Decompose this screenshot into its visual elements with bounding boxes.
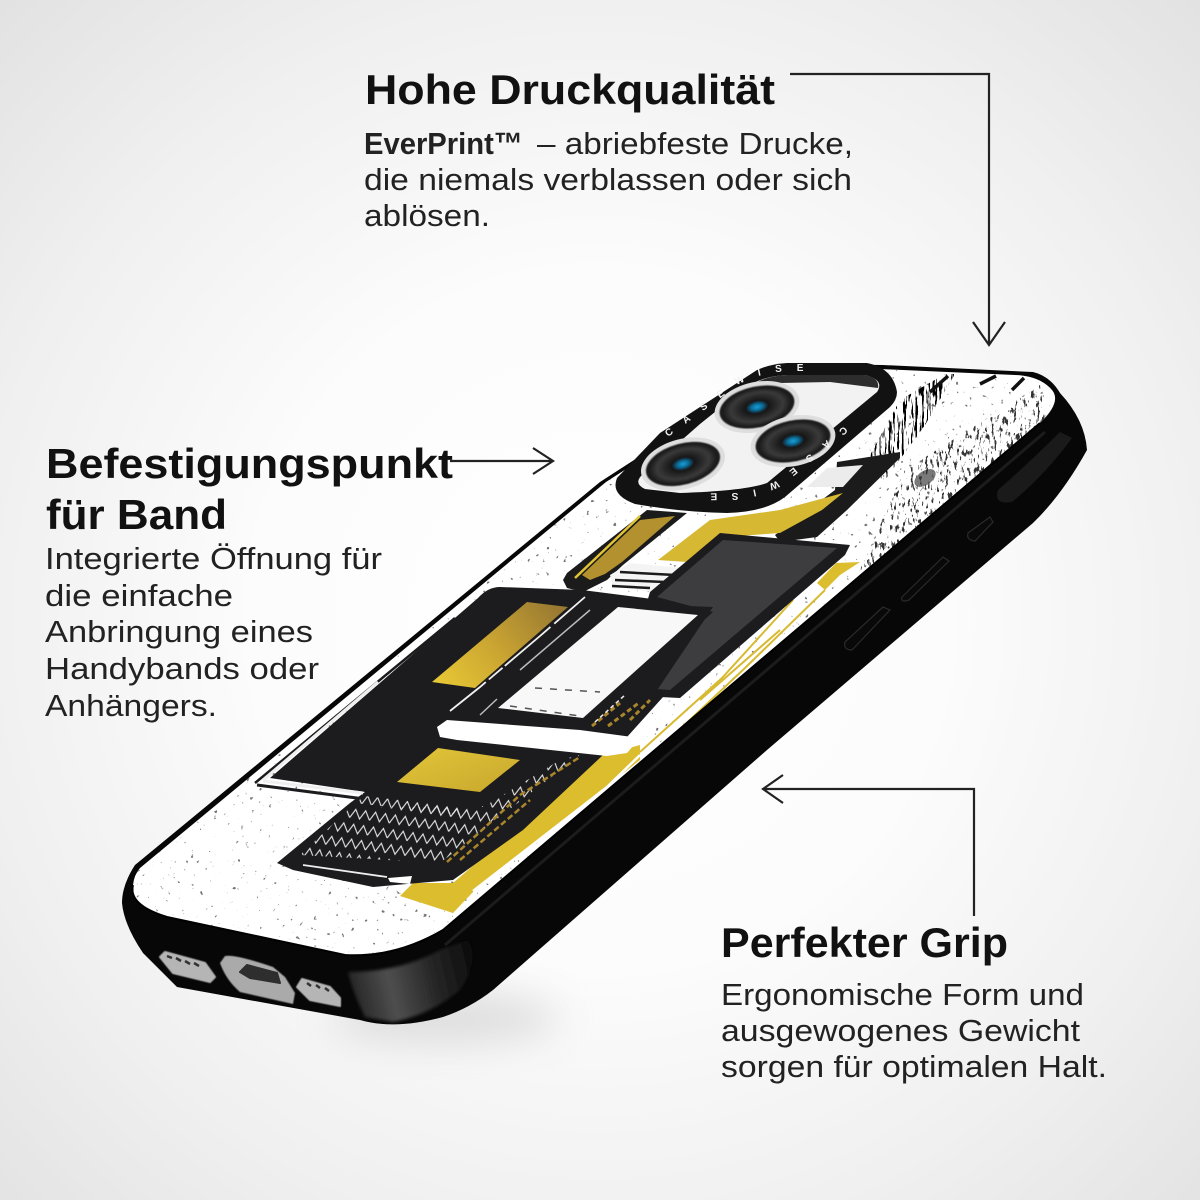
white diagonal streaks [450,597,585,711]
white striped block [610,563,683,592]
ring text upper: CASEWISE [665,364,804,436]
frame black line [257,785,372,800]
big black panel [270,587,660,887]
glass top shade [750,375,878,388]
long gold strip [400,745,640,913]
frame outer line [255,618,455,783]
callout: grip [721,919,1107,1084]
grey panel [657,540,837,690]
phone case [122,363,1087,1024]
brush streaks top [870,374,954,480]
heading: Perfekter Grip [721,919,1008,966]
ring text lower: CASEWISE [710,428,847,500]
centre frame [620,606,713,692]
text block: Integrierte Öffnung für [45,541,382,576]
patterned block [300,755,580,884]
gold square lower [397,748,520,792]
gold patch upper [817,562,860,590]
front face [133,369,1056,954]
text block: Anbringung eines [45,614,313,649]
text block [45,541,382,723]
zigzag field [300,755,580,863]
speaker right [297,979,340,1006]
text block [364,126,853,233]
lens top [710,374,804,440]
black side specks [523,812,596,867]
callout: print quality [364,66,853,233]
text block: sorgen für optimalen Halt. [721,1049,1107,1084]
heading [46,440,453,538]
usb port [220,956,295,1004]
white window [498,607,698,718]
fine specks [134,370,1050,953]
white brush stroke [437,720,640,756]
heading: für Band [46,491,227,538]
speck cluster [914,469,936,487]
gold strip white line [473,755,640,891]
arrow: strap attachment [450,448,553,474]
row of zigzag [355,796,470,815]
text block: Anhängers. [45,688,217,723]
leopard patch upper [591,695,663,736]
speaker left [160,952,215,982]
arrow: print quality [790,74,1005,345]
heading: Befestigungspunkt [46,440,453,487]
face rim line [132,423,1040,955]
bottom corner highlight [348,940,472,1022]
camera ring [615,363,897,513]
text block: EverPrint™ [364,126,523,161]
window scuffs [510,688,600,716]
text block: die niemals verblassen oder sich [364,162,852,197]
sparse field top right [860,385,1044,570]
speckled white window [807,465,863,487]
text block: – abriebfeste Drucke, [537,126,853,161]
grey outline [648,533,850,698]
gold lines upper [640,590,825,752]
side edge bevel [445,432,1045,945]
text block: ablösen. [364,198,490,233]
gold square upper [432,602,568,688]
lens left [635,429,731,499]
side buttons [845,517,993,650]
arrow: grip [763,775,974,916]
dark top-right block [775,452,900,542]
text block: die einfache [45,578,233,613]
gold strip top [658,493,843,562]
gold leopard [447,757,580,862]
text block: ausgewogenes Gewicht [721,1013,1080,1048]
camera glass [638,375,879,493]
camera bump [616,363,897,513]
text block [721,977,1107,1084]
bottom white line [303,865,387,877]
dash marks top right [930,376,1024,392]
phone shadow [330,994,560,1042]
text block: Ergonomische Form und [721,977,1084,1012]
callout: strap attachment [45,440,453,723]
gold bracket [563,510,687,592]
text block: Handybands oder [45,651,319,686]
side switch [997,432,1072,502]
lens right [746,408,840,474]
frame white line [263,682,378,793]
case body [122,364,1087,1024]
heading: Hohe Druckqualität [365,66,775,113]
bottom white patch [388,876,412,884]
